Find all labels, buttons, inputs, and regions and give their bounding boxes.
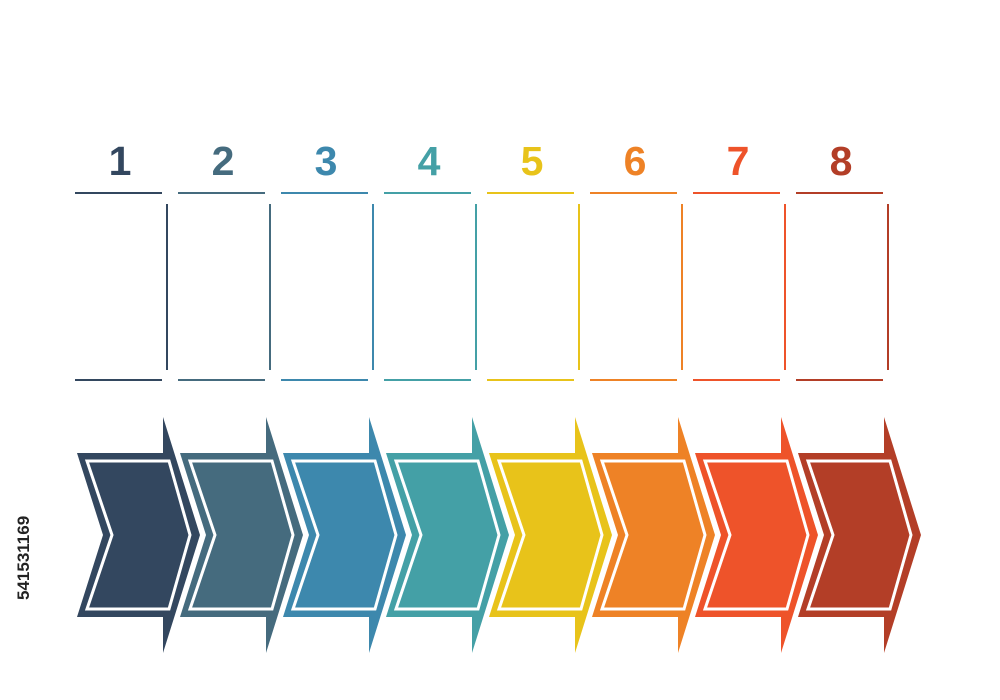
text box 7 [693,193,785,380]
step 6 [590,138,715,653]
arrow 4 [386,417,509,653]
step 5 [487,138,612,653]
number 2: 2 [212,138,234,184]
side id text: 541531169 [14,516,33,600]
number 1: 1 [109,138,131,184]
arrow 3 [283,417,406,653]
arrow 6 [592,417,715,653]
step 2 [178,138,303,653]
step 8 [796,138,921,653]
arrow 2 [180,417,303,653]
text box 5 [487,193,579,380]
text box 6 [590,193,682,380]
arrow 5 [489,417,612,653]
number 8: 8 [830,138,852,184]
arrow 8 [798,417,921,653]
arrow 1 [77,417,200,653]
text box 3 [281,193,373,380]
text box 2 [178,193,270,380]
arrow 7 [695,417,818,653]
text box 4 [384,193,476,380]
number 6: 6 [624,138,646,184]
number 3: 3 [315,138,337,184]
number 4: 4 [418,138,441,184]
step 4 [384,138,509,653]
number 7: 7 [727,138,749,184]
step 7 [693,138,818,653]
text box 1 [75,193,167,380]
text box 8 [796,193,888,380]
step 3 [281,138,406,653]
step 1 [75,138,200,653]
number 5: 5 [521,138,543,184]
